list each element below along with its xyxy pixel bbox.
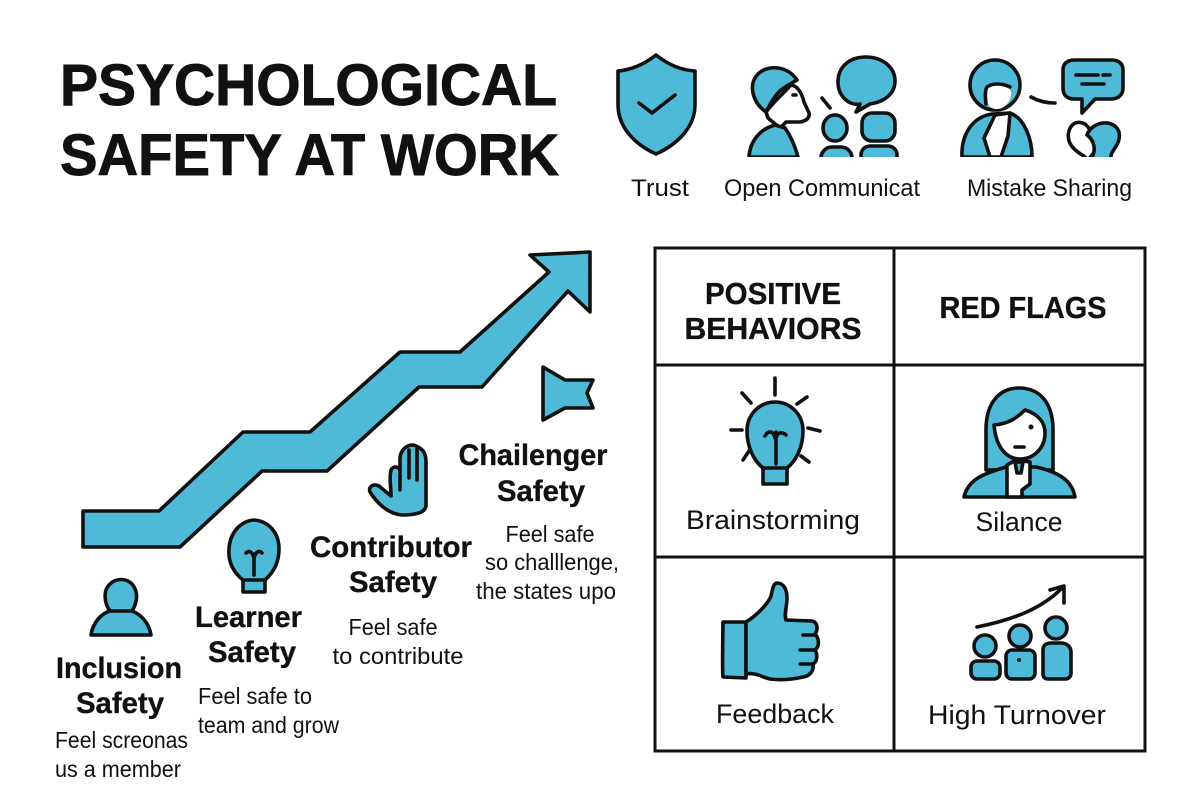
description: inclusion: Feel screonas xyxy=(55,727,188,753)
label: feedback: Feedback xyxy=(716,699,834,729)
title: SAFETY AT WORK xyxy=(60,123,559,188)
description: contributor: Feel safe xyxy=(348,614,438,640)
heading: red flags: RED FLAGS xyxy=(940,290,1106,325)
heading: positive behaviors: POSITIVE xyxy=(705,276,841,311)
icon: person xyxy=(91,580,151,635)
icon: mistake sharing xyxy=(962,60,1123,160)
heading: challenger safety: Chailenger xyxy=(458,439,608,472)
step 1: inclusion safety xyxy=(55,580,188,782)
label: mistake sharing: Mistake Sharing xyxy=(967,175,1132,202)
label: open communication: Open Communicat xyxy=(724,175,920,202)
icon: high turnover people with rising arrow xyxy=(971,586,1071,679)
step 4: challenger safety: so challlenge, xyxy=(485,549,619,575)
step 3: contributor safety: to contribute xyxy=(332,643,464,669)
table grid xyxy=(655,248,1145,751)
description: learner: Feel safe to xyxy=(198,683,312,709)
heading: contributor safety: Contributor xyxy=(310,531,472,564)
table: positive behaviors vs red flags xyxy=(655,248,1145,751)
heading: positive behaviors: BEHAVIORS xyxy=(684,311,862,346)
step 4: challenger safety: Safety xyxy=(497,475,585,508)
step 1: inclusion safety: us a member xyxy=(55,756,181,782)
label: trust: Trust xyxy=(631,175,689,202)
label: brainstorming: Brainstorming xyxy=(686,505,860,535)
icon: silence person xyxy=(964,388,1075,497)
heading: positive behaviors xyxy=(684,276,862,346)
step 1: inclusion safety: Safety xyxy=(76,687,164,720)
icon: brainstorming light bulb xyxy=(731,378,820,484)
label: silence: Silance xyxy=(976,507,1062,537)
description: challenger: Feel safe xyxy=(506,521,594,547)
step 2: learner safety xyxy=(195,520,339,738)
icon: raised hand xyxy=(370,445,426,515)
step 3: contributor safety: Safety xyxy=(349,566,437,599)
title: PSYCHOLOGICAL xyxy=(60,53,557,118)
chart: rising staircase arrow xyxy=(83,252,590,547)
step 4: challenger safety xyxy=(458,367,619,604)
icon: trust shield xyxy=(618,55,695,154)
icon: feedback thumbs up xyxy=(723,583,818,680)
step 4: challenger safety: the states upo xyxy=(476,578,616,604)
icon: flag xyxy=(543,367,593,420)
icon: open communication xyxy=(749,57,897,171)
heading: learner safety: Learner xyxy=(195,601,302,634)
icon: light bulb xyxy=(229,520,279,592)
step 2: learner safety: Safety xyxy=(208,636,296,669)
title xyxy=(60,53,559,188)
heading: inclusion safety: Inclusion xyxy=(56,652,182,685)
label: high turnover: High Turnover xyxy=(928,700,1106,730)
step 3: contributor safety xyxy=(310,445,472,669)
step 2: learner safety: team and grow xyxy=(198,712,339,738)
